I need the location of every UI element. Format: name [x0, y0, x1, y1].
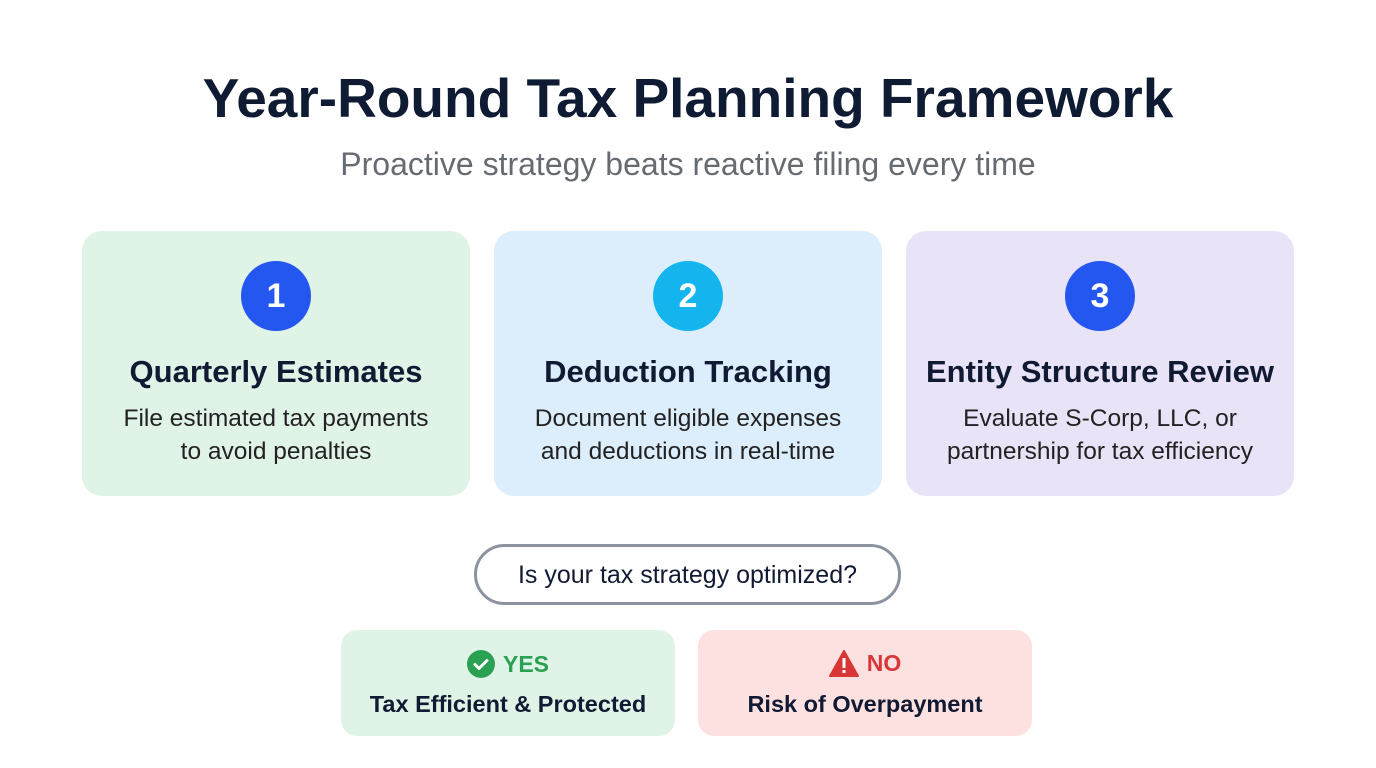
text: Tax Efficient & Protected: [370, 691, 646, 717]
question pill: Is your tax strategy optimized?: [518, 561, 857, 589]
panel: no outcome: [698, 630, 1032, 736]
text block: Document eligible expenses: [535, 405, 841, 432]
text block: and deductions in real-time: [541, 438, 835, 465]
label: yes: YES: [503, 650, 549, 676]
text block: [535, 405, 841, 465]
panel: entity structure review: [906, 231, 1294, 496]
label: yes: [467, 650, 549, 678]
label: no: NO: [867, 650, 901, 676]
text block: partnership for tax efficiency: [947, 438, 1253, 465]
label: no: [829, 650, 901, 677]
title: Year-Round Tax Planning Framework: [203, 67, 1173, 129]
text: Risk of Overpayment: [747, 691, 983, 717]
panel: deduction tracking: [494, 231, 882, 496]
question pill: [474, 544, 901, 605]
icon: number 2: [653, 261, 723, 331]
icon: number 3: 3: [1091, 277, 1109, 315]
heading: Entity Structure Review: [926, 354, 1274, 389]
panel: quarterly estimates: [82, 231, 470, 496]
text block: File estimated tax payments: [123, 405, 429, 432]
text block: [123, 405, 429, 465]
panel: yes outcome: [341, 630, 675, 736]
icon: number 1: [241, 261, 311, 331]
heading: Quarterly Estimates: [130, 354, 422, 389]
text block: [947, 405, 1253, 465]
icon: number 1: 1: [267, 277, 285, 315]
icon: number 3: [1065, 261, 1135, 331]
icon: number 2: 2: [679, 277, 697, 315]
heading: Deduction Tracking: [544, 354, 832, 389]
subtitle: Proactive strategy beats reactive filing every time: [340, 146, 1036, 182]
text block: to avoid penalties: [181, 438, 371, 465]
text block: Evaluate S-Corp, LLC, or: [963, 405, 1237, 432]
